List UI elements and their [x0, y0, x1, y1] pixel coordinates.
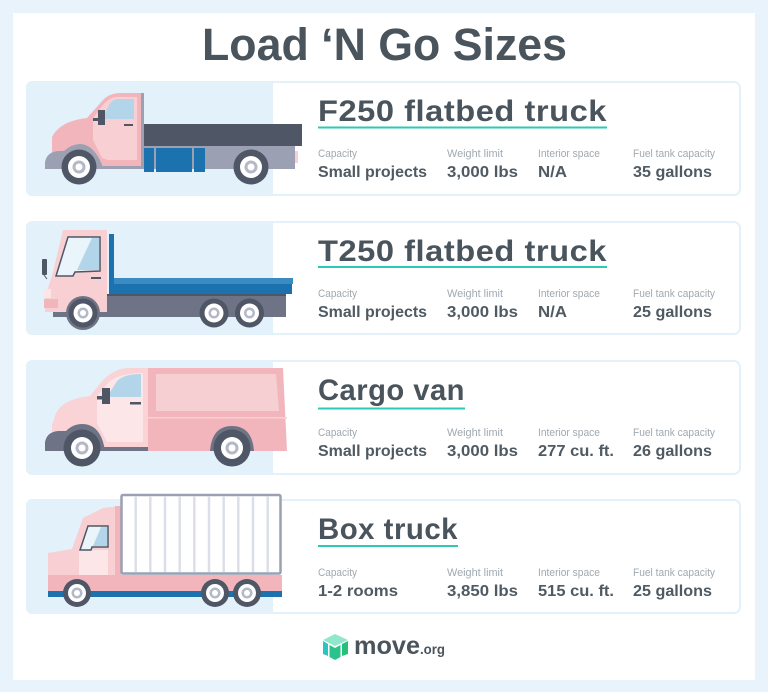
specs: F250: Fuel tank capacity: [633, 148, 715, 160]
icon: cube: [323, 634, 348, 660]
panel: T250 flatbed truck: [26, 221, 740, 335]
panel: F250 flatbed truck: [26, 81, 740, 196]
icon: box truck: [48, 495, 282, 607]
specs: Box truck: Interior space: [538, 567, 600, 579]
heading: T250 flatbed truck: T250 flatbed truck: [318, 235, 607, 268]
icon: F250 truck: [45, 93, 302, 184]
specs: T250: N/A: [538, 304, 567, 321]
specs: F250: N/A: [538, 164, 567, 181]
specs: F250: Weight limit: [447, 148, 503, 160]
specs: T250: Interior space: [538, 288, 600, 300]
specs: Cargo van: Interior space: [538, 427, 600, 439]
specs: F250: Capacity: [318, 148, 357, 160]
specs: Cargo van: Small projects: [318, 443, 427, 460]
heading: Box truck: Box truck: [318, 513, 458, 546]
specs: Box truck: 515 cu. ft.: [538, 583, 614, 600]
heading: F250 flatbed truck: F250 flatbed truck: [318, 95, 607, 128]
specs: Box truck: Capacity: [318, 567, 357, 579]
specs: T250: Small projects: [318, 304, 427, 321]
icon: cargo van: [45, 368, 287, 466]
logo: move.org: [323, 632, 445, 660]
specs: Cargo van: Capacity: [318, 427, 357, 439]
specs: Box truck: 3,850 lbs: [447, 583, 518, 600]
specs: T250: Capacity: [318, 288, 357, 300]
title: Load ‘N Go Sizes: [202, 19, 567, 70]
specs: Cargo van: 26 gallons: [633, 443, 712, 460]
specs: T250: 25 gallons: [633, 304, 712, 321]
specs: T250: [318, 288, 715, 321]
specs: Box truck: Fuel tank capacity: [633, 567, 715, 579]
heading: Cargo van: Cargo van: [318, 374, 465, 407]
icon: T250 truck: [42, 230, 293, 330]
specs: F250: Small projects: [318, 164, 427, 181]
specs: T250: Fuel tank capacity: [633, 288, 715, 300]
specs: F250: 3,000 lbs: [447, 164, 518, 181]
specs: T250: 3,000 lbs: [447, 304, 518, 321]
specs: F250: Interior space: [538, 148, 600, 160]
panel: Box truck: [26, 495, 740, 614]
specs: Box truck: Weight limit: [447, 567, 503, 579]
specs: Box truck: 25 gallons: [633, 583, 712, 600]
logo: move.org: .org: [420, 641, 445, 657]
specs: Box truck: 1-2 rooms: [318, 583, 398, 600]
specs: Box truck: [318, 567, 715, 600]
specs: T250: Weight limit: [447, 288, 503, 300]
specs: Cargo van: 3,000 lbs: [447, 443, 518, 460]
specs: Cargo van: Fuel tank capacity: [633, 427, 715, 439]
wordmark: move: [354, 632, 420, 660]
specs: F250: 35 gallons: [633, 164, 712, 181]
specs: Cargo van: Weight limit: [447, 427, 503, 439]
specs: F250: [318, 148, 715, 181]
specs: Cargo van: [318, 427, 715, 460]
specs: Cargo van: 277 cu. ft.: [538, 443, 614, 460]
panel: Cargo van: [26, 360, 740, 475]
